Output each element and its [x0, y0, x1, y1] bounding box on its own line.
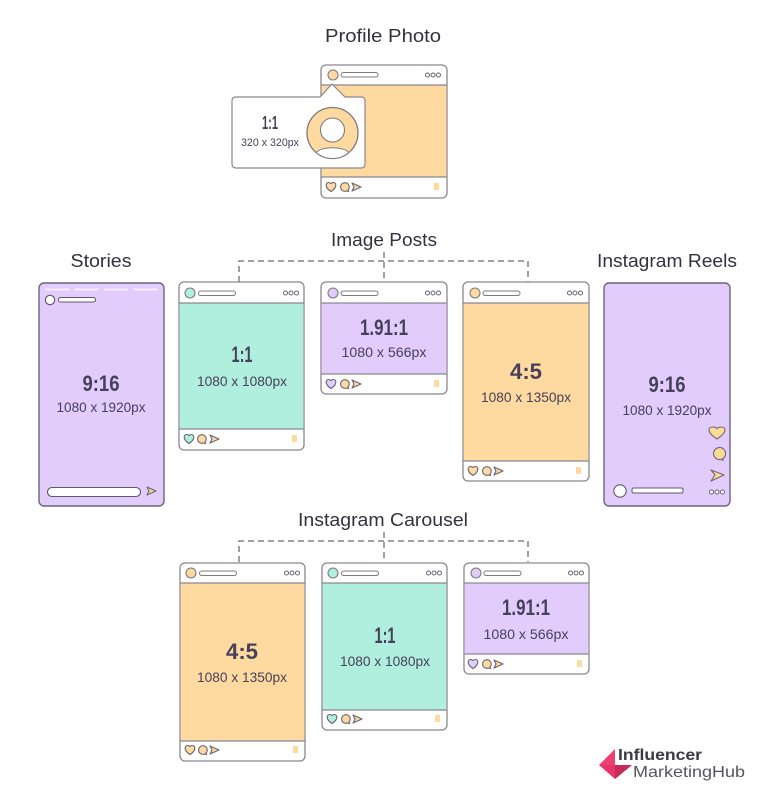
panel: instagram reels: 9:16 [648, 372, 686, 397]
panel: image post 4:5 [463, 282, 589, 481]
logo: Influencer MarketingHub [599, 747, 745, 781]
callout: profile photo size: 320 x 320px [241, 137, 299, 149]
panel: image post 1.91:1: 1.91:1 [360, 315, 408, 340]
panel: image post 1.91:1: 1080 x 566px [342, 344, 426, 360]
title: Instagram Reels: Instagram Reels [597, 251, 737, 271]
panel: carousel 1:1 [322, 563, 447, 730]
callout: profile photo size [232, 84, 365, 168]
panel: stories: 9:16 [82, 371, 120, 396]
panel: carousel 1:1: 1080 x 1080px [340, 653, 430, 669]
panel: carousel 1.91:1 [464, 563, 589, 674]
panel: stories: 1080 x 1920px [56, 399, 146, 415]
panel: carousel 1:1: 1:1 [374, 623, 396, 648]
panel: profile photo post [321, 65, 447, 198]
title: Profile Photo: Profile Photo [325, 26, 441, 46]
panel: carousel 4:5: 1080 x 1350px [197, 669, 287, 685]
callout: profile photo size: 1:1 [262, 113, 278, 133]
panel: image post 1.91:1 [321, 282, 447, 394]
panel: image post 4:5: 4:5 [510, 359, 542, 384]
title: Image Posts: Image Posts [331, 230, 437, 250]
panel: carousel 1.91:1: 1080 x 566px [484, 626, 568, 642]
panel: carousel 4:5 [180, 563, 305, 761]
title: Instagram Carousel: Instagram Carousel [298, 510, 468, 530]
panel: image post 1:1: 1:1 [232, 342, 252, 367]
logo: Influencer MarketingHub: Influencer [618, 747, 702, 764]
panel: carousel 1.91:1: 1.91:1 [502, 595, 550, 620]
panel: image post 4:5: 1080 x 1350px [481, 389, 571, 405]
panel: stories [39, 283, 164, 506]
logo: Influencer MarketingHub: MarketingHub [633, 764, 745, 781]
panel: instagram reels: 1080 x 1920px [622, 402, 712, 418]
panel: image post 1:1: 1080 x 1080px [197, 373, 287, 389]
connector: image posts [239, 252, 528, 282]
panel: instagram reels [604, 283, 730, 506]
title: Stories: Stories [70, 251, 132, 271]
panel: image post 1:1 [179, 282, 304, 450]
connector: carousel [239, 532, 528, 562]
panel: carousel 4:5: 4:5 [226, 639, 258, 664]
